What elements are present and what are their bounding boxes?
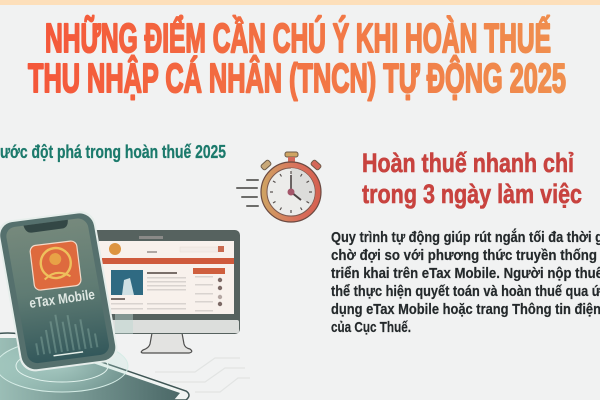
phone notch <box>23 220 69 233</box>
app icon <box>29 240 82 291</box>
top band <box>0 0 600 5</box>
monitor <box>92 230 240 353</box>
icon: stopwatch <box>237 152 322 222</box>
title <box>28 14 566 101</box>
monitor screen <box>99 236 234 314</box>
base device <box>0 333 189 400</box>
phone screen <box>5 217 111 364</box>
phone <box>0 209 120 373</box>
circuit lines <box>155 358 250 392</box>
phone body <box>0 209 120 373</box>
home indicator <box>53 351 83 357</box>
heading: fast refund <box>362 148 582 209</box>
monitor frame <box>92 230 240 334</box>
body text: của Cục Thuế. <box>331 319 411 336</box>
body text <box>331 228 600 336</box>
monitor stand <box>141 333 192 353</box>
app name label: eTax Mobile <box>28 286 96 311</box>
section heading: green: ước đột phá trong hoàn thuế 2025 <box>0 142 226 162</box>
chart bars <box>31 310 98 355</box>
